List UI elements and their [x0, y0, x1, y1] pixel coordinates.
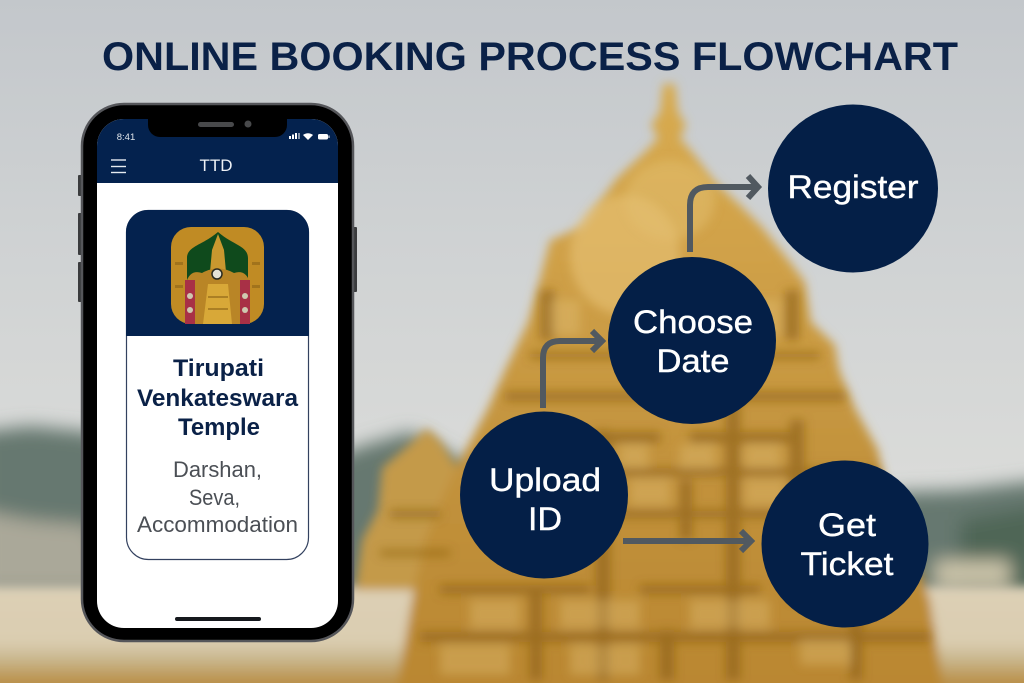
- home indicator: [175, 617, 261, 621]
- phone mockup: [78, 104, 357, 641]
- speaker and camera: [198, 120, 252, 128]
- card header: [126, 210, 309, 336]
- step: register: Register: [788, 169, 919, 205]
- deity icon: [171, 227, 264, 324]
- status icons: [289, 133, 330, 140]
- main temple silhouette: [395, 84, 945, 683]
- phone body: [82, 104, 353, 641]
- hamburger menu icon: [111, 160, 126, 172]
- step: upload id: ID: [528, 501, 562, 537]
- app name: TTD: [200, 156, 232, 175]
- notch: [148, 118, 287, 137]
- arrow: upload id to choose date: [543, 331, 602, 408]
- title: ONLINE BOOKING PROCESS FLOWCHART: [102, 35, 958, 79]
- card services text: Darshan,: [173, 457, 262, 482]
- step: upload id: [460, 412, 628, 578]
- arrow: choose date to register: [690, 176, 758, 252]
- card heading: Tirupati: [173, 355, 264, 382]
- temple card: [126, 210, 309, 560]
- phone side buttons: [78, 175, 357, 302]
- card heading: Temple: [178, 414, 260, 441]
- phone screen: [97, 119, 338, 628]
- step: choose date: [608, 257, 776, 424]
- status time: 8:41: [117, 132, 135, 143]
- small side temple: [355, 428, 478, 590]
- step: get ticket: Get: [818, 507, 876, 543]
- card services text: Accommodation: [137, 512, 298, 537]
- card services text: Seva,: [189, 485, 240, 510]
- step: get ticket: [762, 460, 928, 628]
- arrow: upload id to get ticket: [623, 531, 751, 551]
- step: choose date: Choose: [633, 304, 753, 340]
- card heading: Venkateswara: [137, 385, 299, 412]
- step: register: [768, 104, 938, 272]
- step: upload id: Upload: [489, 462, 601, 498]
- step: get ticket: Ticket: [800, 546, 894, 582]
- step: choose date: Date: [656, 343, 730, 379]
- app header bar: [97, 119, 338, 183]
